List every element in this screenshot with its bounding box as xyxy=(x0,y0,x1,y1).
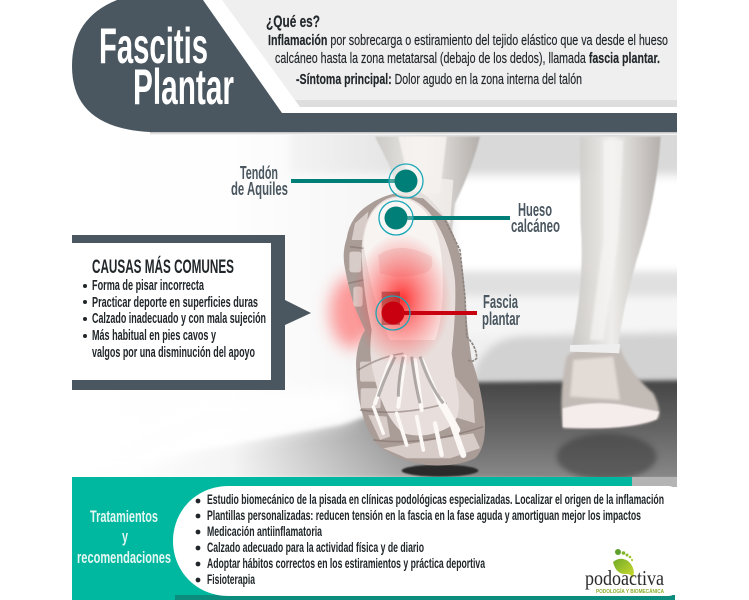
panel: treatments xyxy=(72,477,677,600)
title: Fascitis xyxy=(99,18,208,74)
panel: treatments: Medicación antiinflamatoria xyxy=(207,523,322,539)
list: causes: Más habitual en pies cavos y xyxy=(92,328,216,344)
callout: Fascia plantar xyxy=(376,292,520,330)
callout: Hueso calcáneo: calcáneo xyxy=(511,216,560,236)
laces xyxy=(443,217,477,361)
callout: Hueso calcáneo: Hueso xyxy=(518,200,552,220)
callout: Hueso calcáneo xyxy=(379,200,560,236)
heel bone xyxy=(363,197,443,340)
tread lines xyxy=(348,247,483,442)
heading: treatments: y xyxy=(122,527,128,546)
list: causes xyxy=(83,278,266,361)
floor xyxy=(212,377,677,477)
heading: treatments xyxy=(77,507,171,567)
panel: header light background xyxy=(222,0,677,107)
ankle overlay xyxy=(397,173,453,223)
heading: treatments: recomendaciones xyxy=(77,548,171,567)
text block: definition: ¿Qué es? xyxy=(266,12,320,31)
outer lugs xyxy=(349,212,480,458)
text block: definition: calcáneo hasta la zona metatarsal (debajo de los dedos), llamada fascia plantar. xyxy=(275,51,660,67)
callout: Tendón de Aquiles xyxy=(231,163,423,199)
list: causes: Calzado inadecuado y con mala sujeción xyxy=(92,311,266,327)
list: treatments xyxy=(173,486,676,596)
rear leg and foreground leg xyxy=(375,137,661,480)
background photo xyxy=(197,135,677,477)
list: causes: valgos por una disminución del apoyo xyxy=(92,345,255,361)
logo: podoactiva xyxy=(585,549,665,595)
shoe outline xyxy=(344,191,485,465)
panel: treatments: Fisioterapia xyxy=(207,571,255,587)
panel: treatments: Calzado adecuado para la actividad física y de diario xyxy=(207,539,424,555)
text block: definition xyxy=(266,12,668,88)
list: causes: Practicar deporte en superficies duras xyxy=(92,295,258,311)
title xyxy=(99,18,234,115)
heading: causes: CAUSAS MÁS COMUNES xyxy=(92,256,234,278)
white fade to the left xyxy=(72,133,438,477)
midsole xyxy=(362,197,459,436)
panel: treatments: Adoptar hábitos correctos en los estiramientos y práctica deportiva xyxy=(207,555,485,571)
header xyxy=(72,0,677,135)
pain glow xyxy=(352,233,452,367)
panel: title band xyxy=(72,0,677,132)
blurred window and gym backdrop xyxy=(304,135,677,382)
logo: podoactiva: podoactiva xyxy=(585,566,665,590)
text block: definition: -Síntoma principal: Dolor agudo en la zona interna del talón xyxy=(296,72,582,88)
foot bones xyxy=(373,357,463,455)
list: causes: Forma de pisar incorrecta xyxy=(92,278,205,294)
callout: Fascia plantar: plantar xyxy=(482,309,520,329)
callout: Tendón de Aquiles: Tendón xyxy=(240,163,278,183)
callout: Tendón de Aquiles: de Aquiles xyxy=(231,179,288,199)
icon: pain glow left of shoe xyxy=(330,276,374,348)
heading: treatments: Tratamientos xyxy=(90,507,158,526)
panel: causes xyxy=(72,235,311,390)
illustration: running shoe sole with foot bones xyxy=(344,173,485,465)
callout: Fascia plantar: Fascia xyxy=(483,292,519,312)
title: Plantar xyxy=(133,59,234,115)
logo: podoactiva: PODOLOGÍA Y BIOMECÁNICA xyxy=(596,587,664,595)
icon: green foot xyxy=(613,549,634,578)
